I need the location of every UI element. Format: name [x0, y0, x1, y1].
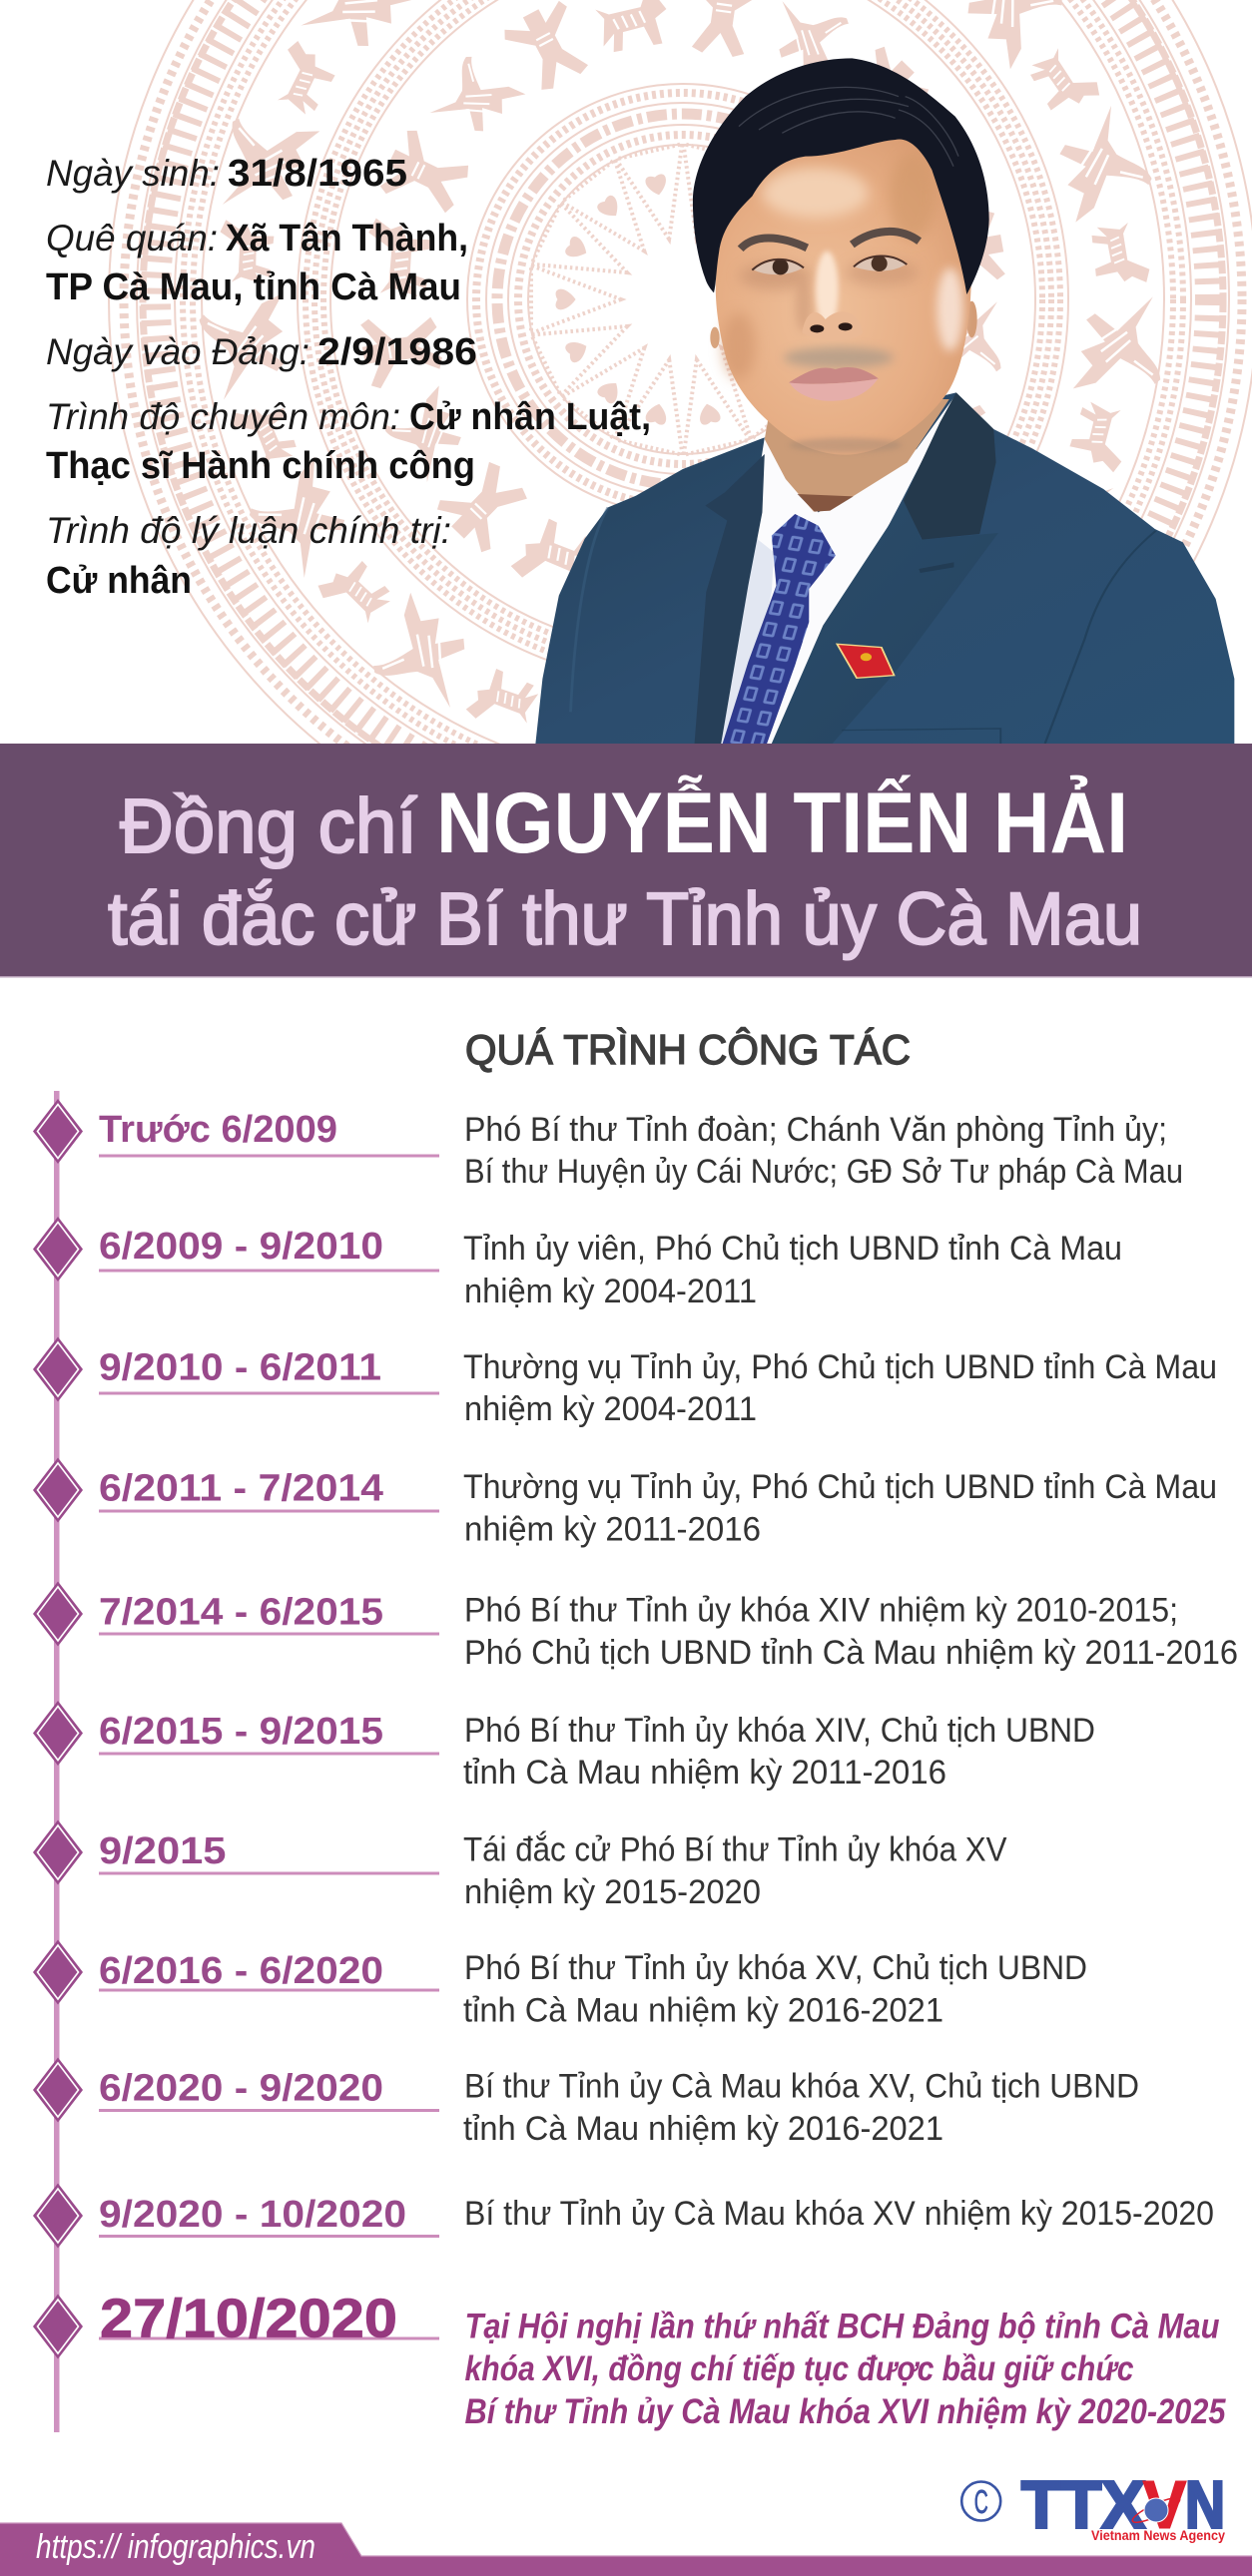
party admission date: Ngày vào Đảng:: [46, 331, 310, 372]
timeline row 1: [33, 1099, 1183, 1191]
timeline row 3: Thường vụ Tỉnh ủy, Phó Chủ tịch UBND tỉnh Cà Mau: [463, 1348, 1217, 1386]
timeline row 7: Tái đắc cử Phó Bí thư Tỉnh ủy khóa XV: [463, 1830, 1006, 1868]
timeline row 2: Tỉnh ủy viên, Phó Chủ tịch UBND tỉnh Cà Mau: [463, 1230, 1122, 1268]
title line 1: [120, 775, 1128, 871]
drum outer animal band: [198, 0, 1169, 782]
timeline row 7: [33, 1820, 1006, 1911]
date of birth: 31/8/1965: [228, 153, 407, 195]
title banner: [0, 744, 1252, 978]
timeline row 9: [33, 2058, 1139, 2148]
timeline row 2: [33, 1217, 1122, 1310]
timeline row 6: tỉnh Cà Mau nhiệm kỳ 2011-2016: [463, 1754, 946, 1792]
hair: [693, 58, 989, 294]
timeline row 11: highlighted re-election: [33, 2288, 1226, 2431]
section heading: QUÁ TRÌNH CÔNG TÁC: [465, 1026, 911, 1073]
timeline row 5: Phó Bí thư Tỉnh ủy khóa XIV nhiệm kỳ 2010-2015;: [464, 1591, 1178, 1629]
timeline row 2: 6/2009 - 9/2010: [99, 1226, 383, 1268]
timeline: [33, 1091, 1238, 2432]
ears: [710, 327, 720, 348]
timeline row 6: Phó Bí thư Tỉnh ủy khóa XIV, Chủ tịch UBND: [464, 1712, 1095, 1750]
title line 2: tái đắc cử Bí thư Tỉnh ủy Cà Mau: [108, 877, 1142, 960]
date of birth: [46, 153, 407, 195]
party admission date: [46, 331, 477, 373]
timeline row 10: 9/2020 - 10/2020: [99, 2194, 406, 2236]
political theory level: [46, 510, 451, 602]
website url: https:// infographics.vn: [36, 2528, 315, 2566]
personal info block: [46, 153, 651, 602]
TTXVN wordmark: TTX: [1021, 2467, 1145, 2543]
lips: [789, 367, 879, 384]
title line 1: Đồng chí: [120, 783, 418, 869]
timeline row 11: highlighted re-election: 27/10/2020: [100, 2288, 397, 2349]
professional qualification: [46, 396, 651, 487]
portrait photo of Nguyễn Tiến Hải: [535, 58, 1234, 744]
timeline row 8: [33, 1940, 1087, 2030]
bronze drum background pattern: [108, 0, 1252, 744]
copyright icon: C: [974, 2483, 988, 2520]
nose: [802, 311, 863, 340]
footer bar: [0, 2523, 1252, 2576]
timeline row 1: Phó Bí thư Tỉnh đoàn; Chánh Văn phòng Tỉnh ủy;: [464, 1111, 1167, 1149]
timeline row 6: 6/2015 - 9/2015: [99, 1711, 383, 1753]
timeline row 1: Trước 6/2009: [99, 1109, 337, 1151]
timeline row 7: nhiệm kỳ 2015-2020: [464, 1873, 761, 1911]
TTXVN wordmark: Vietnam News Agency: [1091, 2527, 1225, 2543]
head: [693, 58, 989, 455]
professional qualification: Trình độ chuyên môn:: [46, 396, 400, 437]
suit and shirt: [535, 392, 1234, 744]
timeline row 6: [33, 1701, 1095, 1792]
hometown: Xã Tân Thành,: [226, 218, 468, 259]
timeline row 1: Bí thư Huyện ủy Cái Nước; GĐ Sở Tư pháp Cà Mau: [464, 1153, 1183, 1191]
timeline row 10: Bí thư Tỉnh ủy Cà Mau khóa XV nhiệm kỳ 2015-2020: [464, 2195, 1214, 2233]
timeline row 2: nhiệm kỳ 2004-2011: [464, 1273, 757, 1310]
timeline row 5: [33, 1581, 1238, 1672]
professional qualification: Cử nhân Luật,: [409, 396, 651, 438]
necktie: [723, 514, 836, 744]
timeline row 3: 9/2010 - 6/2011: [99, 1347, 381, 1389]
TTXVN wordmark: [1021, 2467, 1225, 2543]
timeline row 3: nhiệm kỳ 2004-2011: [464, 1390, 757, 1428]
timeline row 8: tỉnh Cà Mau nhiệm kỳ 2016-2021: [463, 1992, 943, 2030]
hometown: Quê quán:: [46, 218, 218, 258]
drum central star: [529, 142, 767, 457]
timeline row 7: 9/2015: [99, 1830, 226, 1872]
timeline row 4: nhiệm kỳ 2011-2016: [464, 1511, 761, 1549]
right lapel lower: [772, 501, 998, 744]
timeline row 5: 7/2014 - 6/2015: [99, 1591, 383, 1633]
timeline vertical line: [54, 1091, 60, 2432]
professional qualification: Thạc sĩ Hành chính công: [46, 445, 475, 487]
timeline row 4: [33, 1457, 1217, 1549]
copyright icon: [961, 2481, 1000, 2521]
date of birth: Ngày sinh:: [46, 153, 220, 194]
hometown: [46, 218, 468, 308]
drum inner figure band: [357, 0, 1010, 626]
timeline row 9: Bí thư Tỉnh ủy Cà Mau khóa XV, Chủ tịch UBND: [464, 2068, 1139, 2106]
timeline row 8: 6/2016 - 6/2020: [99, 1950, 383, 1992]
timeline row 4: Thường vụ Tỉnh ủy, Phó Chủ tịch UBND tỉnh Cà Mau: [463, 1468, 1217, 1506]
hometown: TP Cà Mau, tỉnh Cà Mau: [46, 266, 461, 308]
face: [716, 137, 971, 455]
TTXVN logo: [961, 2467, 1225, 2543]
party admission date: 2/9/1986: [317, 331, 477, 373]
timeline row 8: Phó Bí thư Tỉnh ủy khóa XV, Chủ tịch UBND: [464, 1949, 1087, 1987]
timeline row 3: [33, 1337, 1217, 1428]
party pin: [837, 644, 894, 678]
moustache stubble: [784, 347, 894, 368]
political theory level: Cử nhân: [46, 560, 192, 602]
left lapel: [695, 454, 765, 744]
timeline row 9: tỉnh Cà Mau nhiệm kỳ 2016-2021: [463, 2110, 943, 2148]
right lapel upper: [904, 392, 996, 540]
title line 1: NGUYỄN TIẾN HẢI: [436, 775, 1128, 871]
TTXVN wordmark: V: [1143, 2467, 1186, 2543]
TTXVN wordmark: N: [1185, 2467, 1225, 2543]
timeline row 10: [33, 2184, 1214, 2248]
eyes: [754, 260, 803, 274]
timeline row 9: 6/2020 - 9/2020: [99, 2068, 383, 2110]
eyebrows: [741, 238, 807, 249]
political theory level: Trình độ lý luận chính trị:: [46, 510, 451, 551]
timeline row 4: 6/2011 - 7/2014: [99, 1467, 383, 1509]
timeline row 11: highlighted re-election: khóa XVI, đồng chí tiếp tục được bầu giữ chức: [465, 2349, 1134, 2388]
